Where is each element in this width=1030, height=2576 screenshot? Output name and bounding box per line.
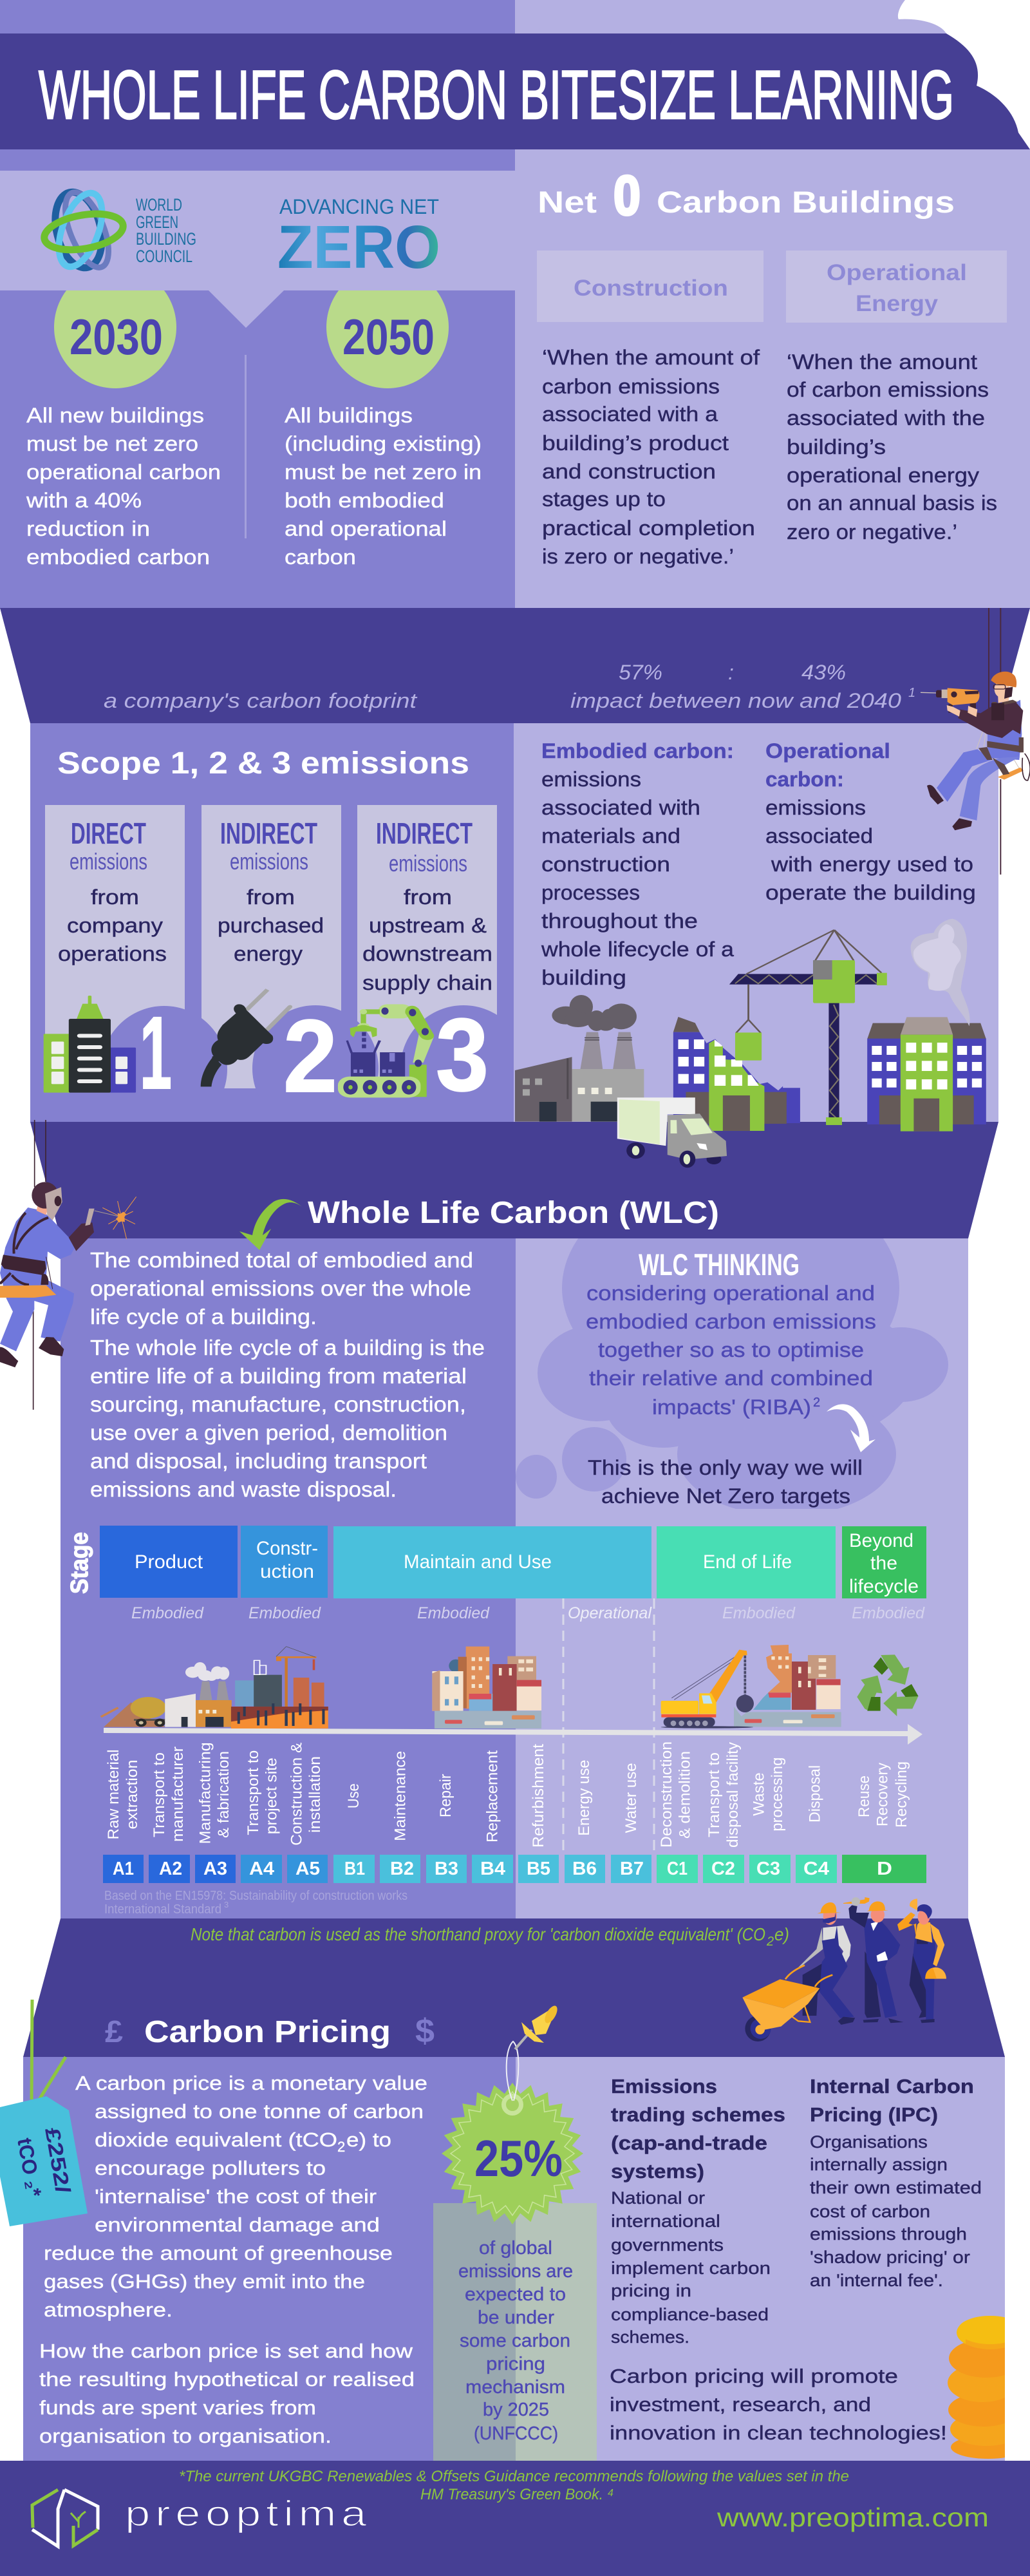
text: emissions trading schemes: trading schemes bbox=[611, 2103, 785, 2126]
box: Operational Energy bbox=[786, 251, 1007, 323]
footnote: green book: *The current UKGBC Renewables & Offsets Guidance recommends following the values set in the bbox=[179, 2468, 849, 2485]
price tag: £252/tCO2: tCO ₂* bbox=[13, 2136, 46, 2199]
text: WLC definition: life cycle of a building. bbox=[90, 1305, 317, 1329]
text: construction definition: practical completion bbox=[542, 516, 755, 540]
heading: Carbon Pricing: £ bbox=[105, 2015, 123, 2049]
card 1 text: direct: company bbox=[67, 914, 163, 937]
lifecycle module codes: C4 bbox=[803, 1859, 829, 1879]
text: how price is set: How the carbon price is set and how bbox=[39, 2340, 413, 2362]
footnote: EN15978: 3 bbox=[224, 1900, 229, 1909]
text: 2050 target: (including existing) bbox=[285, 432, 482, 455]
box: Construction: Construction bbox=[574, 276, 728, 301]
text: internal carbon pricing: emissions through bbox=[810, 2224, 967, 2244]
text: internal carbon pricing: an 'internal fee'. bbox=[810, 2271, 943, 2290]
illustration: product and construction bbox=[101, 1647, 328, 1728]
text: operational energy definition: zero or negative.’ bbox=[787, 520, 957, 544]
lifecycle module codes: A1 bbox=[113, 1859, 134, 1879]
grey tag with 25 percent text: be under bbox=[478, 2307, 554, 2328]
worker 3 bbox=[897, 1899, 946, 2023]
footnote: EN15978: Based on the EN15978: Sustainability of construction works bbox=[104, 1889, 407, 1903]
text: construction definition: ‘When the amount of bbox=[542, 346, 760, 369]
card 2 text: indirect purchased: emissions bbox=[230, 848, 308, 875]
logo: Preoptima house bbox=[32, 2490, 98, 2546]
panel: scope emissions bbox=[30, 723, 998, 1132]
icon: city buildings bbox=[44, 996, 136, 1093]
text: 2050 target: carbon bbox=[285, 545, 356, 569]
lifecycle module labels: & fabrication bbox=[215, 1751, 232, 1838]
logo: World Green Building Council: COUNCIL bbox=[136, 247, 192, 266]
text: operational energy definition: ‘When the amount bbox=[787, 350, 977, 374]
numerals 1 2 3: 2 bbox=[283, 998, 337, 1113]
lifecycle module codes: B3 bbox=[435, 1859, 458, 1879]
lifecycle module labels: Transport to bbox=[151, 1752, 168, 1837]
callout: WLC thinking cloud: achieve Net Zero targets bbox=[601, 1484, 850, 1508]
footnote: green book bbox=[179, 2468, 849, 2503]
text: 2050 target: both embodied bbox=[285, 489, 444, 512]
text: 2050 target bbox=[285, 404, 482, 569]
grey tag with 25 percent text: expected to bbox=[465, 2284, 566, 2305]
card 3 text: indirect supply chain bbox=[362, 817, 492, 994]
carbon type labels: Embodied bbox=[722, 1604, 796, 1622]
text: internal carbon pricing: Internal Carbon bbox=[810, 2075, 974, 2098]
text: carbon price definition: environmental damage and bbox=[95, 2213, 380, 2236]
text: emissions trading schemes: governments bbox=[611, 2235, 724, 2255]
lifecycle module labels: Use bbox=[345, 1783, 362, 1808]
stage boxes: lifecycle bbox=[849, 1576, 919, 1597]
price tag: £252/tCO2 bbox=[0, 2000, 88, 2226]
text: 2030 target: reduction in bbox=[26, 517, 150, 540]
text: embodied carbon definition: Embodied carbon: bbox=[541, 739, 734, 762]
band: carbon footprint intro: 57% bbox=[619, 661, 662, 684]
band: carbon pricing header bbox=[23, 1918, 1005, 2057]
callout: WLC thinking cloud: together so as to optimise bbox=[598, 1338, 864, 1361]
link: website: www.preoptima.com bbox=[716, 2503, 989, 2532]
box: Operational Energy: Energy bbox=[856, 291, 939, 316]
logo: Advancing Net Zero: ADVANCING NET bbox=[279, 195, 439, 218]
lifecycle module labels: Transport to bbox=[706, 1752, 723, 1837]
light smoke bbox=[911, 919, 970, 1026]
text: operational energy definition: of carbon emissions bbox=[787, 378, 989, 401]
grey tag with 25 percent text: emissions are bbox=[458, 2261, 573, 2282]
box: Operational Energy: Operational bbox=[827, 260, 967, 285]
text: carbon price definition: 'internalise' the cost of their bbox=[95, 2185, 377, 2208]
badge: 25 percent: 25% bbox=[474, 2130, 563, 2187]
text: WLC definition: The combined total of embodied and bbox=[90, 1248, 473, 1272]
text: WLC definition: emissions and waste disposal. bbox=[90, 1477, 397, 1501]
text: embodied carbon definition: associated with bbox=[541, 796, 700, 819]
lifecycle module labels: extraction bbox=[124, 1759, 141, 1829]
stage boxes: End of Life bbox=[703, 1551, 792, 1573]
lifecycle module labels: Recovery bbox=[874, 1763, 892, 1826]
logo: World Green Building Council bbox=[41, 187, 196, 273]
text: operational energy definition bbox=[787, 350, 997, 544]
band: carbon footprint intro: a company's carbon footprint bbox=[104, 689, 417, 712]
text: emissions trading schemes: implement carbon bbox=[611, 2259, 771, 2278]
note: carbon shorthand: e) bbox=[774, 1924, 789, 1944]
factory smoke bbox=[552, 995, 637, 1031]
heading: Carbon Pricing bbox=[105, 2012, 435, 2050]
callout: WLC thinking cloud: 2 bbox=[813, 1396, 820, 1410]
title banner bbox=[0, 0, 1030, 149]
text: carbon pricing conclusion bbox=[610, 2365, 947, 2444]
badge: 25 percent bbox=[442, 2083, 583, 2224]
text: emissions trading schemes: pricing in bbox=[611, 2281, 691, 2300]
card 3 text: indirect supply chain: supply chain bbox=[362, 971, 492, 994]
lifecycle module codes bbox=[103, 1855, 926, 1883]
text: emissions trading schemes: Emissions bbox=[611, 2075, 717, 2098]
text: construction definition: and construction bbox=[542, 460, 716, 483]
carbon type labels: Embodied bbox=[248, 1604, 321, 1622]
lifecycle module labels: Raw material bbox=[105, 1749, 122, 1839]
text: internal carbon pricing: cost of carbon bbox=[810, 2202, 930, 2221]
lifecycle module codes: B4 bbox=[480, 1859, 505, 1879]
year 2050: 2050 bbox=[342, 308, 435, 365]
lifecycle module labels: Maintenance bbox=[392, 1751, 409, 1841]
arrow: lifecycle timeline bbox=[104, 1724, 922, 1745]
text: operational carbon definition: with energy used to bbox=[771, 853, 973, 876]
lifecycle module labels: disposal facility bbox=[724, 1742, 742, 1848]
icon: robot arm on conveyor bbox=[338, 1004, 434, 1097]
panel: targets 2030 and 2050 bbox=[0, 171, 515, 538]
text: WLC definition bbox=[90, 1248, 485, 1501]
text: carbon price definition: encourage polluters to bbox=[95, 2157, 326, 2179]
heading: Scope 1, 2 & 3 emissions: Scope 1, 2 & 3 emissions bbox=[57, 746, 469, 781]
illustration: rope worker with drill bbox=[921, 608, 1030, 875]
text: 2030 target: operational carbon bbox=[26, 460, 221, 484]
band: carbon footprint intro bbox=[0, 608, 1030, 723]
text: 2050 target: must be net zero in bbox=[285, 460, 482, 484]
right building bbox=[867, 1023, 986, 1039]
grey tag with 25 percent text: of global bbox=[479, 2238, 552, 2259]
label: Stage: Stage bbox=[66, 1532, 93, 1594]
scope cards bbox=[45, 805, 497, 1088]
band: carbon footprint intro: 1 bbox=[908, 686, 915, 700]
text: 2030 target bbox=[26, 404, 221, 569]
heading: Net 0 Carbon Buildings bbox=[538, 165, 955, 227]
text: embodied carbon definition: construction bbox=[541, 853, 670, 876]
lifecycle module labels: Repair bbox=[437, 1774, 454, 1817]
lifecycle module codes: A4 bbox=[249, 1859, 274, 1879]
lifecycle module labels: project site bbox=[263, 1757, 281, 1834]
text: emissions trading schemes: (cap-and-trade bbox=[611, 2132, 767, 2154]
text: carbon pricing conclusion: investment, research, and bbox=[610, 2393, 871, 2416]
text: WLC definition: sourcing, manufacture, construction, bbox=[90, 1392, 466, 1416]
card 3 text: indirect supply chain: upstream & bbox=[369, 914, 487, 937]
lifecycle module codes: A5 bbox=[295, 1859, 320, 1879]
lifecycle module codes: B1 bbox=[344, 1859, 365, 1879]
partial blue green building bbox=[673, 1017, 700, 1032]
factory bbox=[580, 1032, 603, 1070]
text: embodied carbon definition: emissions bbox=[541, 768, 641, 791]
text: internal carbon pricing: Organisations bbox=[810, 2132, 928, 2152]
lifecycle module labels: processing bbox=[769, 1757, 786, 1832]
text: internal carbon pricing: their own estimated bbox=[810, 2178, 982, 2197]
text: WLC definition: operational emissions over the whole bbox=[90, 1276, 471, 1300]
callout: WLC thinking cloud: impacts' (RIBA) bbox=[652, 1396, 811, 1419]
grey tag with 25 percent text: (UNFCCC) bbox=[474, 2423, 558, 2444]
text: operational carbon definition: carbon: bbox=[765, 768, 844, 791]
text: how price is set: funds are spent varies from bbox=[39, 2396, 316, 2419]
card 2 text: indirect purchased: from bbox=[247, 886, 295, 909]
text: carbon price definition: A carbon price is a monetary value bbox=[75, 2072, 427, 2094]
text: operational carbon definition: Operational bbox=[765, 739, 890, 762]
text: construction definition: carbon emissions bbox=[542, 375, 720, 398]
icon: coin stack bbox=[948, 2316, 1005, 2459]
footnote: EN15978 bbox=[104, 1889, 407, 1917]
year 2030: 2030 bbox=[70, 308, 163, 365]
heading: WLC thinking: WLC THINKING bbox=[639, 1247, 800, 1282]
heading: Carbon Pricing: Carbon Pricing bbox=[144, 2015, 391, 2049]
text: operational energy definition: operational energy bbox=[787, 464, 979, 487]
carbon type labels: Embodied bbox=[131, 1604, 204, 1622]
text: operational carbon definition bbox=[765, 739, 976, 904]
grey tag with 25 percent text bbox=[433, 2203, 597, 2462]
footnote: EN15978: International Standard bbox=[104, 1902, 221, 1917]
lifecycle module labels bbox=[105, 1741, 910, 1848]
text: how price is set: the resulting hypothetical or realised bbox=[39, 2368, 415, 2391]
illustration: workers with wheelbarrow bbox=[742, 1897, 946, 2041]
text: emissions trading schemes: international bbox=[611, 2211, 720, 2231]
band: WLC header background bbox=[30, 1122, 998, 1238]
text: carbon pricing conclusion: Carbon pricing will promote bbox=[610, 2365, 898, 2387]
text: WLC definition: entire life of a building from material bbox=[90, 1364, 467, 1388]
card 1 text: direct bbox=[58, 817, 167, 965]
carbon type labels: Embodied bbox=[852, 1604, 925, 1622]
crane bbox=[829, 1000, 839, 1119]
illustration: industry and construction skyline bbox=[515, 919, 986, 1168]
text: carbon price definition bbox=[44, 2072, 427, 2321]
text: 2050 target: and operational bbox=[285, 517, 447, 540]
carbon type labels: Embodied bbox=[417, 1604, 490, 1622]
heading: Net 0 Carbon Buildings: 0 bbox=[613, 165, 641, 227]
wordmark: preoptima: preoptima bbox=[125, 2493, 371, 2533]
lifecycle module labels: Disposal bbox=[806, 1765, 824, 1823]
text: embodied carbon definition: materials and bbox=[541, 824, 680, 848]
icon: pin and string bbox=[507, 2004, 560, 2101]
grey tag with 25 percent text: pricing bbox=[486, 2354, 545, 2374]
text: embodied carbon definition: building bbox=[541, 966, 626, 989]
footnote: green book: HM Treasury's Green Book. bbox=[420, 2486, 603, 2503]
numerals 1 2 3 bbox=[140, 995, 489, 1113]
text: embodied carbon definition: processes bbox=[541, 881, 640, 904]
stage boxes: Maintain and Use bbox=[404, 1551, 552, 1573]
footer band bbox=[0, 2461, 1030, 2576]
text: 2030 target: with a 40% bbox=[26, 489, 142, 512]
band: carbon footprint intro: impact between now and 2040 bbox=[570, 689, 901, 712]
text: emissions trading schemes: compliance-based bbox=[611, 2305, 769, 2324]
heading: Whole Life Carbon (WLC): Whole Life Carbon (WLC) bbox=[308, 1196, 719, 1230]
text: carbon price definition: e) to bbox=[346, 2128, 391, 2151]
grey tag with 25 percent text: by 2025 bbox=[483, 2400, 549, 2420]
card 1 text: direct: from bbox=[91, 886, 139, 909]
grey tag with 25 percent text: mechanism bbox=[465, 2377, 565, 2398]
lifecycle module codes: C2 bbox=[711, 1859, 735, 1879]
logo: Advancing Net Zero: ZERO bbox=[277, 213, 440, 281]
operational dashed dividers bbox=[563, 1598, 654, 1853]
card 2 text: indirect purchased: purchased bbox=[218, 914, 324, 937]
grey tag with 25 percent text: some carbon bbox=[460, 2331, 570, 2351]
card 3 text: indirect supply chain: INDIRECT bbox=[376, 817, 473, 850]
lifecycle module labels: Refurbishment bbox=[530, 1744, 547, 1848]
stage boxes: Beyond bbox=[849, 1530, 913, 1551]
lifecycle module labels: Recycling bbox=[893, 1761, 910, 1828]
lifecycle module codes: B6 bbox=[572, 1859, 597, 1879]
card 1 text: direct: emissions bbox=[70, 848, 147, 875]
stage boxes: the bbox=[870, 1553, 897, 1574]
text: emissions trading schemes bbox=[611, 2075, 785, 2347]
box: Construction bbox=[537, 251, 763, 322]
lifecycle module codes: A2 bbox=[159, 1859, 182, 1879]
note: carbon shorthand: 2 bbox=[766, 1935, 774, 1949]
text: operational carbon definition: operate the building bbox=[765, 881, 976, 904]
band: carbon footprint intro: : bbox=[728, 661, 734, 684]
lifecycle module labels: manufacturer bbox=[169, 1747, 187, 1842]
lifecycle module labels: Deconstruction bbox=[658, 1741, 675, 1848]
heading: Carbon Pricing: $ bbox=[415, 2012, 435, 2050]
text: operational carbon definition: emissions bbox=[765, 796, 866, 819]
text: 2030 target: All new buildings bbox=[26, 404, 204, 427]
panel: carbon pricing bbox=[23, 2057, 1005, 2461]
text: carbon price definition: atmosphere. bbox=[44, 2298, 173, 2321]
text: 2050 target: All buildings bbox=[285, 404, 413, 427]
text: emissions trading schemes: schemes. bbox=[611, 2327, 689, 2347]
lifecycle module labels: installation bbox=[306, 1756, 324, 1833]
callout: WLC thinking cloud: embodied carbon emissions bbox=[586, 1310, 876, 1333]
text: carbon price definition: reduce the amount of greenhouse bbox=[44, 2242, 393, 2264]
numerals 1 2 3: 1 bbox=[140, 995, 172, 1110]
truck bbox=[617, 1097, 695, 1146]
illustration: demolition crane bbox=[661, 1645, 841, 1728]
text: embodied carbon definition bbox=[541, 739, 734, 989]
lifecycle module labels: Water use bbox=[623, 1763, 640, 1833]
numerals 1 2 3: 3 bbox=[436, 997, 489, 1112]
callout: WLC thinking cloud bbox=[516, 1238, 948, 1509]
lifecycle module labels: Transport to bbox=[245, 1750, 262, 1835]
text: embodied carbon definition: whole lifecycle of a bbox=[541, 938, 734, 961]
lifecycle module codes: B5 bbox=[527, 1859, 550, 1879]
text: operational energy definition: building’s bbox=[787, 435, 886, 459]
logo: World Green Building Council: BUILDING bbox=[136, 229, 196, 249]
carbon type labels bbox=[131, 1604, 925, 1622]
text: 2030 target: embodied carbon bbox=[26, 545, 210, 569]
text: internal carbon pricing: 'shadow pricing' or bbox=[810, 2248, 970, 2267]
text: internal carbon pricing bbox=[810, 2075, 982, 2290]
text: 2030 target: must be net zero bbox=[26, 432, 198, 455]
text: emissions trading schemes: systems) bbox=[611, 2160, 704, 2183]
illustration: welder rope worker bbox=[0, 1120, 136, 1410]
band: carbon footprint intro: 43% bbox=[801, 661, 846, 684]
lifecycle module labels: Construction & bbox=[288, 1743, 305, 1846]
text: internal carbon pricing: Pricing (IPC) bbox=[810, 2103, 938, 2126]
text: construction definition: stages up to bbox=[542, 488, 666, 511]
text: carbon price definition: dioxide equivalent (tCO bbox=[95, 2128, 337, 2151]
text: operational carbon definition: associated bbox=[765, 824, 873, 848]
text: carbon price definition: gases (GHGs) they emit into the bbox=[44, 2270, 365, 2293]
price tag: £252/tCO2: £252/ bbox=[41, 2126, 75, 2195]
worker 1 bbox=[798, 1902, 855, 2025]
lifecycle module codes: B2 bbox=[390, 1859, 414, 1879]
text: carbon price definition: 2 bbox=[337, 2139, 345, 2155]
lifecycle module codes: D bbox=[877, 1859, 892, 1879]
text: emissions trading schemes: National or bbox=[611, 2188, 705, 2208]
arrow: green curved bbox=[239, 1199, 304, 1250]
stage boxes: uction bbox=[260, 1561, 314, 1582]
arrow: white curved bbox=[827, 1404, 876, 1452]
card 3 text: indirect supply chain: downstream bbox=[362, 942, 492, 965]
text: WLC definition: use over a given period, demolition bbox=[90, 1421, 447, 1444]
logo: World Green Building Council: WORLD bbox=[136, 195, 182, 214]
lifecycle module labels: Replacement bbox=[483, 1750, 501, 1842]
stage boxes: Constr- bbox=[256, 1538, 318, 1559]
icon: recycling symbol bbox=[857, 1654, 919, 1716]
icon: plug bbox=[201, 990, 290, 1086]
lifecycle module labels: Reuse bbox=[856, 1776, 873, 1817]
text: construction definition bbox=[542, 346, 760, 568]
text: WLC definition: The whole life cycle of a building is the bbox=[90, 1336, 485, 1359]
illustration: maintain and use city bbox=[432, 1647, 541, 1728]
lifecycle module codes: C1 bbox=[667, 1859, 688, 1879]
callout: WLC thinking cloud: This is the only way we will bbox=[588, 1456, 863, 1479]
text: construction definition: is zero or negative.’ bbox=[542, 545, 734, 568]
lifecycle module labels: Manufacturing bbox=[197, 1742, 214, 1844]
heading: Net 0 Carbon Buildings: Net bbox=[538, 185, 597, 219]
carbon type labels: Operational bbox=[568, 1604, 652, 1622]
card 1 text: direct: operations bbox=[58, 942, 167, 965]
text: construction definition: building’s product bbox=[542, 431, 729, 455]
card 2 text: indirect purchased: INDIRECT bbox=[220, 817, 317, 850]
card 1 text: direct: DIRECT bbox=[71, 817, 146, 850]
wheelbarrow bbox=[785, 1965, 805, 1979]
callout: WLC thinking cloud: considering operational and bbox=[586, 1282, 875, 1305]
text: embodied carbon definition: throughout the bbox=[541, 909, 698, 933]
heading: Net 0 Carbon Buildings: Carbon Buildings bbox=[657, 185, 955, 219]
text: internal carbon pricing: internally assign bbox=[810, 2155, 948, 2174]
stage boxes: Product bbox=[135, 1551, 203, 1573]
lifecycle module codes: C3 bbox=[756, 1859, 780, 1879]
lifecycle module codes: A3 bbox=[203, 1859, 227, 1879]
logo: World Green Building Council: GREEN bbox=[136, 213, 178, 232]
callout: WLC thinking cloud: their relative and combined bbox=[589, 1367, 873, 1390]
text: WLC definition: and disposal, including transport bbox=[90, 1449, 427, 1473]
card 2 text: indirect purchased: energy bbox=[234, 942, 303, 965]
panel: WLC bbox=[61, 1238, 968, 1918]
text: how price is set bbox=[39, 2340, 415, 2447]
text: operational energy definition: on an annual basis is bbox=[787, 491, 997, 515]
card 3 text: indirect supply chain: from bbox=[404, 886, 452, 909]
panel: top background bbox=[0, 0, 1030, 609]
lifecycle module labels: & demolition bbox=[676, 1751, 693, 1839]
card 3 text: indirect supply chain: emissions bbox=[389, 850, 467, 876]
lifecycle module labels: Waste bbox=[751, 1772, 768, 1816]
lifecycle module codes: B7 bbox=[620, 1859, 644, 1879]
text: construction definition: associated with a bbox=[542, 402, 718, 426]
text: carbon price definition: assigned to one tonne of carbon bbox=[95, 2100, 424, 2123]
card 2 text: indirect purchased bbox=[218, 817, 324, 965]
footnote: green book: 4 bbox=[608, 2488, 613, 2499]
text: operational energy definition: associated with the bbox=[787, 406, 985, 430]
text: carbon pricing conclusion: innovation in clean technologies! bbox=[610, 2421, 947, 2444]
lifecycle module labels: Energy use bbox=[576, 1760, 593, 1836]
worker 2 bbox=[843, 1897, 903, 2023]
note: carbon shorthand: Note that carbon is used as the shorthand proxy for 'carbon dioxide equivalent' (CO bbox=[191, 1924, 765, 1944]
text: how price is set: organisation to organisation. bbox=[39, 2425, 332, 2447]
stage boxes bbox=[100, 1526, 926, 1598]
